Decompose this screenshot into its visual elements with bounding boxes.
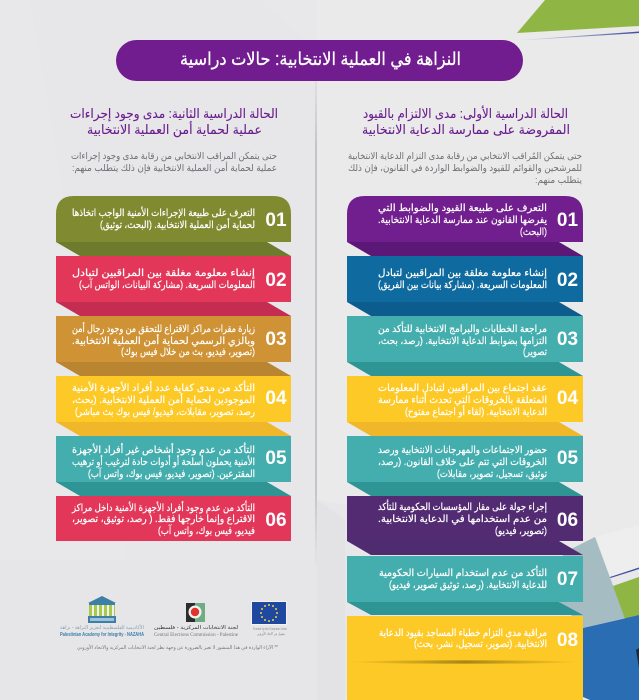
- case one step 03: 03: [557, 329, 578, 350]
- case two step 02: إنشاء معلومة مغلقة بين المراقبين لتبادل: [72, 268, 255, 279]
- logo: European Union: بتمويل من الاتحاد الأوروبي: [257, 631, 285, 636]
- logo: European Union: [251, 601, 287, 636]
- case two step 05: التأكد من عدم وجود أشخاص غير أفراد الأجهزة: [72, 442, 255, 456]
- title banner: النزاهة في العملية الانتخابية: حالات دراسية: [180, 49, 461, 70]
- case two step 06: فيديو، فيس بوك، واتس آب): [158, 524, 255, 537]
- case two step 03: [56, 316, 291, 376]
- case one step 07: [347, 556, 583, 615]
- case two step 01: التعرف على طبيعة الإجراءات الأمنية الواجب اتخاذها: [72, 206, 255, 219]
- case one step 07: للدعاية الانتخابية. (رصد، توثيق تصوير، فيديو): [389, 580, 547, 591]
- case two step 01: [56, 196, 291, 256]
- case one step 04: المتعلقة بالخروقات التي تحدث أثناء ممارسة: [378, 393, 547, 406]
- logo: European Union: Funded by the European Union: [253, 626, 287, 631]
- heading: case study two: الحالة الدراسية الثانية: مدى وجود إجراءات: [70, 106, 278, 122]
- case two step 04: [56, 376, 291, 436]
- case one step 02: [347, 256, 583, 316]
- case one step 08: مراقبة مدى التزام خطباء المساجد بقيود الدعاية: [379, 628, 547, 639]
- case one step 04: عقد اجتماع بين المراقبين لتبادل المعلومات: [378, 383, 547, 394]
- case two step 01: لحماية أمن العملية الانتخابية. (البحث، توثيق): [100, 218, 255, 231]
- case one step 08: الانتخابية. (تصوير، تسجيل، نشر، بحث): [414, 639, 547, 650]
- case one step 04: [347, 376, 583, 436]
- case one step 05: 05: [557, 448, 578, 469]
- logo: NAZAHA academy: الأكاديمية الفلسطينية لتعزيز النزاهة - نزاهة: [60, 624, 144, 631]
- case two step 04: 04: [265, 388, 287, 409]
- intro text: case study one: [348, 151, 582, 186]
- case one step 01: [347, 196, 583, 256]
- case one step 03: مراجعة الخطابات والبرامج الانتخابية للتأكد من: [378, 321, 547, 335]
- case one step 06: [347, 496, 583, 555]
- case one step 05: حضور الاجتماعات والمهرجانات الانتخابية ورصد: [378, 445, 547, 456]
- case two step 05: الأمنية يحملون أسلحة أو أدوات حادة لترغيب أو ترهيب: [72, 455, 255, 468]
- case one step 02: 02: [557, 270, 578, 291]
- heading: case study one: [362, 105, 570, 138]
- heading: case study two: [70, 106, 278, 138]
- title banner: [116, 40, 523, 81]
- heading: case study two: عملية لحماية أمن العملية الانتخابية: [87, 121, 262, 138]
- case one step 03: [347, 316, 583, 376]
- intro text: case study two: عملية لحماية أمن العملية الانتخابية فإن ذلك يتطلب منهم:: [72, 161, 277, 174]
- logo: NAZAHA academy: [60, 596, 144, 638]
- decoration: bottom-right shapes: [560, 525, 639, 700]
- case one step 05: [347, 436, 583, 496]
- heading: case study one: الحالة الدراسية الأولى: مدى الالتزام بالقيود: [363, 105, 568, 122]
- case one step 07: التأكد من عدم استخدام السيارات الحكومية: [379, 565, 547, 579]
- case one step 05: الخروقات التي تتم على خلاف القانون. (رصد،: [378, 457, 547, 468]
- case one step 07: 07: [557, 569, 578, 590]
- case one step 02: إنشاء معلومة مغلقة بين المراقبين لتبادل: [378, 268, 547, 279]
- case one step 08: 08: [557, 630, 578, 651]
- case two step 05: 05: [265, 448, 287, 469]
- heading: case study one: المفروضة على ممارسة الدعاية الانتخابية: [362, 122, 570, 138]
- case two step 06: [56, 496, 291, 541]
- case one step 01: التعرف على طبيعة القيود والضوابط التي: [378, 203, 547, 214]
- intro text: case study one: للمرشحين والقوائم للقيود والضوابط الواردة في القانون، فإن ذلك: [348, 163, 582, 174]
- logo: Central Elections Commission: Central Elections Commission - Palestine: [154, 633, 239, 638]
- case two step 03: وبالزي الرسمي لحماية أمن العملية الانتخابية.: [72, 334, 255, 347]
- case two step 03: (تصوير، فيديو، بث من خلال فيس بوك): [121, 347, 255, 358]
- case one step 04: 04: [557, 388, 578, 409]
- case two step 05: [56, 436, 291, 496]
- intro text: case study one: يتطلب منهم:: [535, 175, 582, 186]
- case one step 03: تصوير): [523, 347, 547, 358]
- case one step 04: الدعاية الانتخابية. (لقاء أو اجتماع مفتوح): [405, 405, 547, 418]
- case one step 08: [347, 616, 583, 700]
- case one step 06: 06: [557, 510, 578, 531]
- intro text: case study two: حتى يتمكن المراقب الانتخابي من رقابة مدى وجود إجراءات: [71, 151, 277, 162]
- case two step 03: 03: [265, 329, 287, 350]
- logo: Central Elections Commission: [154, 603, 239, 638]
- case two step 05: المقترعين. (تصوير، فيديو، فيس بوك، واتس آب): [88, 467, 255, 480]
- case two step 02: 02: [265, 270, 287, 291]
- case two step 06: الاقتراع وإنما خارجها فقط. ( رصد، توثيق، تصوير،: [72, 514, 255, 525]
- footnote: ** الآراء الواردة في هذا المنشور لا تعبر بالضرورة عن وجهة نظر لجنة الانتخابات المركزية والاتحاد الأوروبي: [77, 644, 278, 651]
- case one step 06: إجراء جولة على مقار المؤسسات الحكومية للتأكد: [378, 499, 547, 513]
- case one step 05: توثيق، تسجيل، تصوير، مقابلات): [437, 469, 547, 480]
- case two step 02: [56, 256, 291, 316]
- case two step 03: زيارة مقرات مراكز الاقتراع للتحقق من وجود رجال أمن: [72, 322, 255, 335]
- case two step 01: 01: [265, 210, 287, 231]
- case two step 04: التأكد من مدى كفاية عدد أفراد الأجهزة الأمنية: [72, 380, 255, 394]
- logo: Central Elections Commission: لجنة الانتخابات المركزية - فلسطين: [154, 625, 239, 631]
- logo: NAZAHA academy: Palestinian Academy for Integrity - NAZAHA: [60, 632, 144, 638]
- case two step 06: التأكد من عدم وجود أفراد الأجهزة الأمنية داخل مراكز: [71, 500, 255, 514]
- case two step 02: المعلومات السريعة. (مشاركة البيانات، الواتس آب): [79, 278, 255, 291]
- case one step 06: من عدم استخدامها في الدعاية الانتخابية.: [378, 514, 547, 525]
- intro text: case study one: حتى يتمكن المُراقب الانتخابي من رقابة مدى التزام الدعاية الانتخابية: [348, 151, 582, 162]
- intro text: case study two: [71, 151, 277, 174]
- case one step 02: المعلومات السريعة. (مشاركة بيانات بين الفريق): [378, 280, 547, 291]
- decoration: top-right green shape and line: [517, 0, 639, 40]
- case one step 03: التزامها بضوابط الدعاية الانتخابية. (رصد، بحث،: [378, 336, 547, 347]
- case two step 06: 06: [265, 510, 287, 531]
- case two step 04: الموجودين لحماية أمن العملية الانتخابية. (بحث،: [72, 393, 255, 406]
- case one step 01: 01: [557, 210, 578, 231]
- case one step 01: يفرضها القانون عند ممارسة الدعاية الانتخابية.: [378, 215, 547, 226]
- case one step 01: (البحث): [520, 227, 547, 238]
- case one step 06: (تصوير، فيديو): [495, 526, 547, 537]
- case two step 04: رصد، تصوير، مقابلات، فيديو/ فيس بوك بث مباشر): [75, 407, 255, 418]
